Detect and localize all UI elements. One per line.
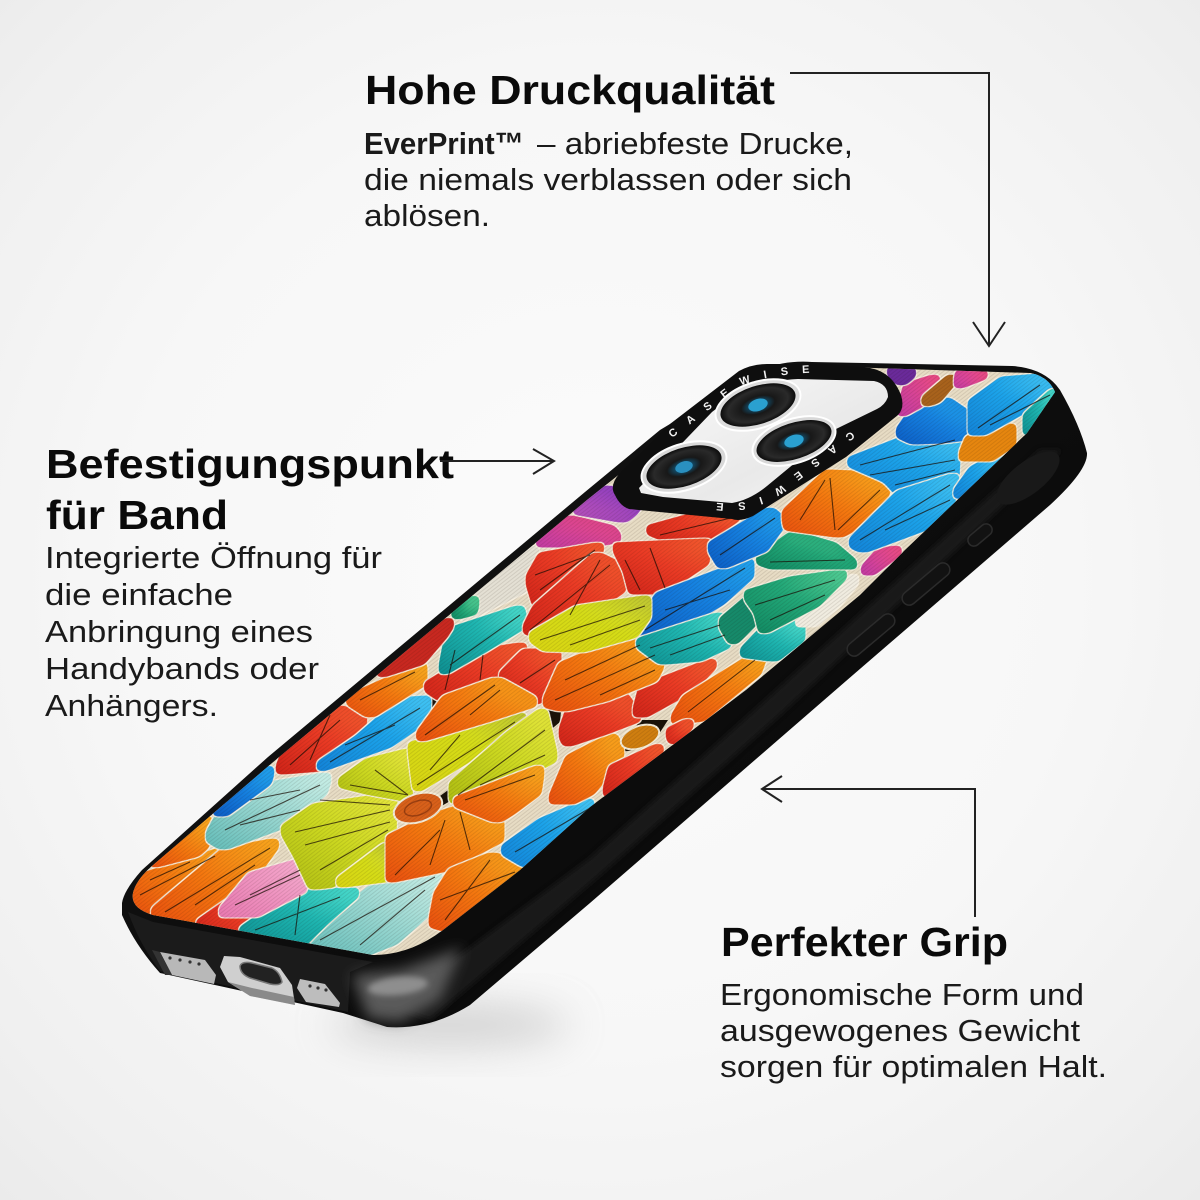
text block: grip: Ergonomische Form und [720,977,1084,1012]
arrow: strap anchor [440,449,554,474]
heading: strap anchor: Befestigungspunkt [46,441,454,487]
arrow: print quality [790,73,1005,346]
arrow: grip [762,776,975,917]
text block: strap anchor: Anbringung eines [45,614,313,649]
clear glass [639,379,888,503]
lens top [709,370,807,440]
text block: strap anchor: Integrierte Öffnung für [45,540,382,575]
case body [122,362,1087,1027]
text block: strap anchor [45,540,382,723]
right speaker grille [297,979,340,1007]
text block: print quality: die niemals verblassen oder sich [364,162,852,197]
heading: strap anchor: für Band [46,492,228,538]
text block: grip: ausgewogenes Gewicht [720,1013,1080,1048]
case side sheen [392,450,1062,1020]
island frame [613,364,902,520]
veins [140,385,1050,945]
corner gloss [352,948,462,1022]
text block: strap anchor: die einfache [45,577,233,612]
lens left [635,432,733,502]
dark gaps [432,698,668,806]
heading: strap anchor [46,441,454,538]
text block: grip: sorgen für optimalen Halt. [720,1049,1107,1084]
left speaker grille [152,950,216,984]
text block: print quality: EverPrint™ [364,126,524,161]
heading: print quality: Hohe Druckqualität [365,67,775,113]
petals [133,371,1055,953]
text block: print quality [364,126,853,233]
text block: strap anchor: Handybands oder [45,651,319,686]
brand text top: CASEWISE [669,365,810,436]
print base [120,360,1070,960]
gloss highlight [367,974,429,998]
case bottom face [128,912,373,1012]
text block: print quality: ablösen. [364,198,490,233]
small disc [620,724,660,750]
flower centre [392,792,444,824]
back print: stained-glass petals [120,360,1070,960]
camera island [612,364,902,520]
fine texture [120,360,1070,960]
text block: strap anchor: Anhängers. [45,688,218,723]
brand text bottom: CASEWISE [716,432,854,511]
phone case [122,362,1087,1027]
text block: print quality: – abriebfeste Drucke, [537,126,853,161]
text block: grip [720,977,1107,1084]
charging port [220,956,295,1005]
side buttons [844,442,1068,659]
phone shadow [330,1005,570,1045]
heading: grip: Perfekter Grip [721,919,1008,965]
lens right [746,407,842,475]
